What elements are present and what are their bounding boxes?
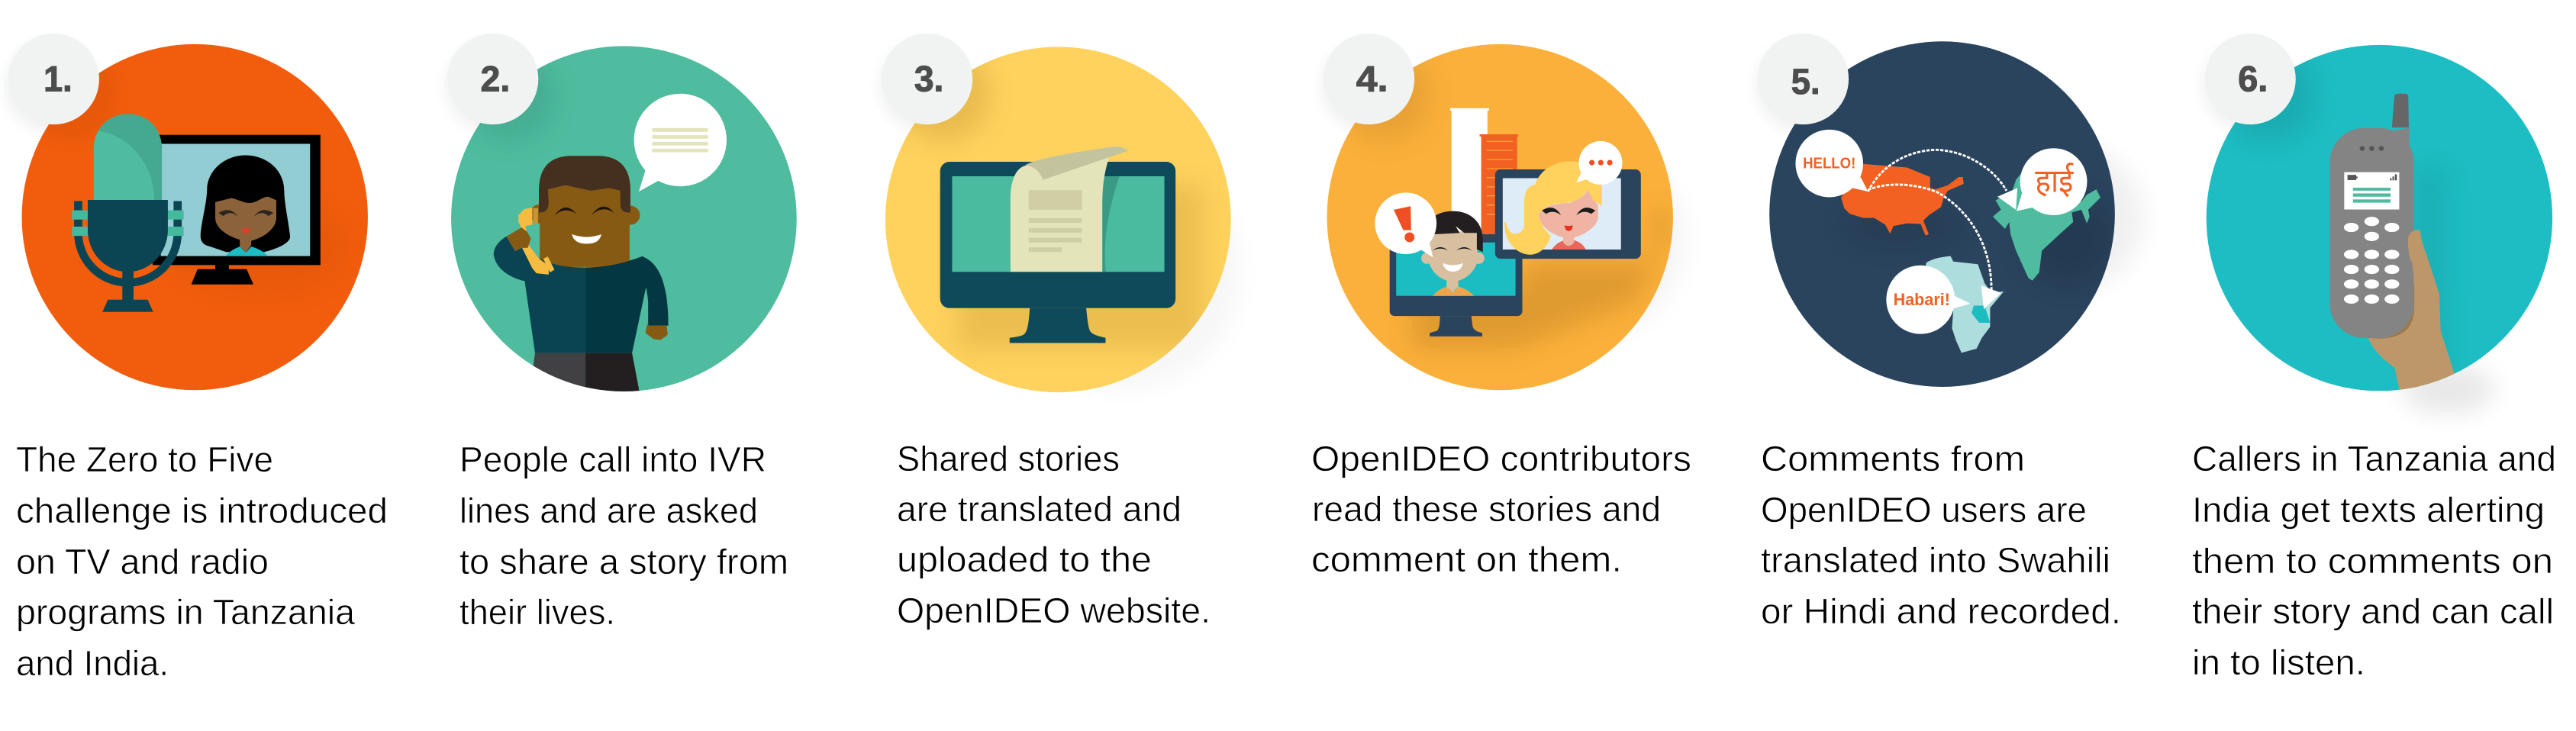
text: step 6 description: Callers in Tanzania and (2192, 439, 2556, 478)
amber circle (1327, 44, 1673, 390)
text: step 1 description: challenge is introduced (16, 491, 388, 530)
text: step 1 description: on TV and radio (16, 542, 269, 581)
Hindi bubble (2017, 148, 2087, 215)
text: step 3 description: Shared stories (897, 439, 1120, 478)
text: step 4 description: read these stories and (1312, 489, 1661, 529)
text: step 6 description (2192, 439, 2556, 682)
text: step 1 description: and India. (16, 643, 169, 683)
ellipsis speech bubble (1576, 141, 1623, 185)
map: Africa (1923, 256, 2004, 353)
green circle (451, 46, 797, 391)
text: step 3 description (897, 439, 1211, 630)
text: step 6 description: in to listen. (2192, 642, 2365, 682)
number badge 3: 3. (914, 59, 943, 99)
text: step 6 description: India get texts alerting (2192, 490, 2545, 530)
number badge 2: 2. (481, 59, 510, 99)
number badge 2 (447, 34, 538, 124)
text: step 4 description: OpenIDEO contributors (1311, 439, 1691, 478)
text: step 5 description: Comments from (1761, 439, 2025, 478)
text: step 2 description: to share a story from (459, 542, 788, 581)
text: step 3 description: are translated and (897, 489, 1182, 529)
step 1 illustration (5, 34, 368, 390)
step 4 illustration (1320, 34, 1688, 390)
number badge 5: 5. (1791, 61, 1820, 101)
icon: television (153, 135, 321, 285)
dashed connection arcs (1868, 150, 2007, 290)
arrow tip at India (1997, 188, 2017, 210)
arrow tip at Africa (1981, 285, 2001, 309)
icon: hand holding phone (2329, 94, 2455, 392)
icon: microphone (72, 114, 184, 312)
number badge 6 (2205, 34, 2296, 124)
number badge 6: 6. (2238, 59, 2268, 99)
number badge 3 (882, 34, 972, 124)
text: step 5 description: translated into Swahili (1761, 540, 2110, 580)
Habari bubble (1886, 266, 1971, 334)
step 6 illustration (2202, 34, 2552, 414)
number badge 1 (8, 34, 99, 124)
text: step 2 description: People call into IVR (459, 440, 766, 479)
number badge 5 (1758, 34, 1849, 124)
text: step 2 description: lines and are asked (459, 491, 758, 530)
step 2 illustration (444, 34, 797, 391)
text: step 3 description: uploaded to the (897, 539, 1152, 579)
Habari bubble: Habari! (1894, 290, 1950, 309)
step 3 illustration (879, 34, 1241, 392)
boy on monitor (1390, 211, 1523, 337)
teal circle (2207, 45, 2552, 391)
icon: desktop monitor (940, 162, 1175, 343)
number badge 1: 1. (44, 59, 73, 99)
Hindi bubble: हाई (2035, 163, 2074, 206)
woman on tablet (1495, 161, 1641, 259)
icon: document page (1011, 147, 1129, 272)
exclamation speech bubble (1375, 192, 1436, 257)
text: step 5 description: OpenIDEO users are (1761, 490, 2087, 530)
speech bubble (634, 94, 727, 192)
man on telephone (494, 156, 669, 391)
text: step 1 description: programs in Tanzania (16, 592, 355, 632)
navy circle (1769, 41, 2115, 387)
step 5 illustration (1755, 34, 2144, 387)
map: India (1993, 173, 2100, 281)
text: step 5 description: or Hindi and recorded. (1761, 591, 2121, 631)
text: step 6 description: their story and can call (2192, 591, 2554, 631)
text: step 5 description (1761, 439, 2121, 631)
text: step 6 description: them to comments on (2192, 541, 2553, 581)
number badge 4 (1323, 34, 1414, 124)
text: step 2 description (459, 440, 788, 632)
text: step 2 description: their lives. (459, 592, 615, 632)
map: United States (1841, 164, 1964, 236)
number badge 4: 4. (1356, 59, 1388, 99)
Hello bubble (1795, 130, 1868, 197)
text: step 4 description: comment on them. (1311, 539, 1622, 579)
Hello bubble: HELLO! (1803, 156, 1855, 172)
orange circle (22, 44, 368, 390)
text: step 1 description: The Zero to Five (16, 440, 273, 479)
yellow circle (885, 47, 1231, 392)
text: step 1 description (16, 440, 388, 683)
map: Tanzania (1971, 306, 1990, 323)
text: step 3 description: OpenIDEO website. (897, 591, 1211, 630)
icon: test tubes (1450, 108, 1518, 237)
text: step 4 description (1311, 439, 1691, 579)
